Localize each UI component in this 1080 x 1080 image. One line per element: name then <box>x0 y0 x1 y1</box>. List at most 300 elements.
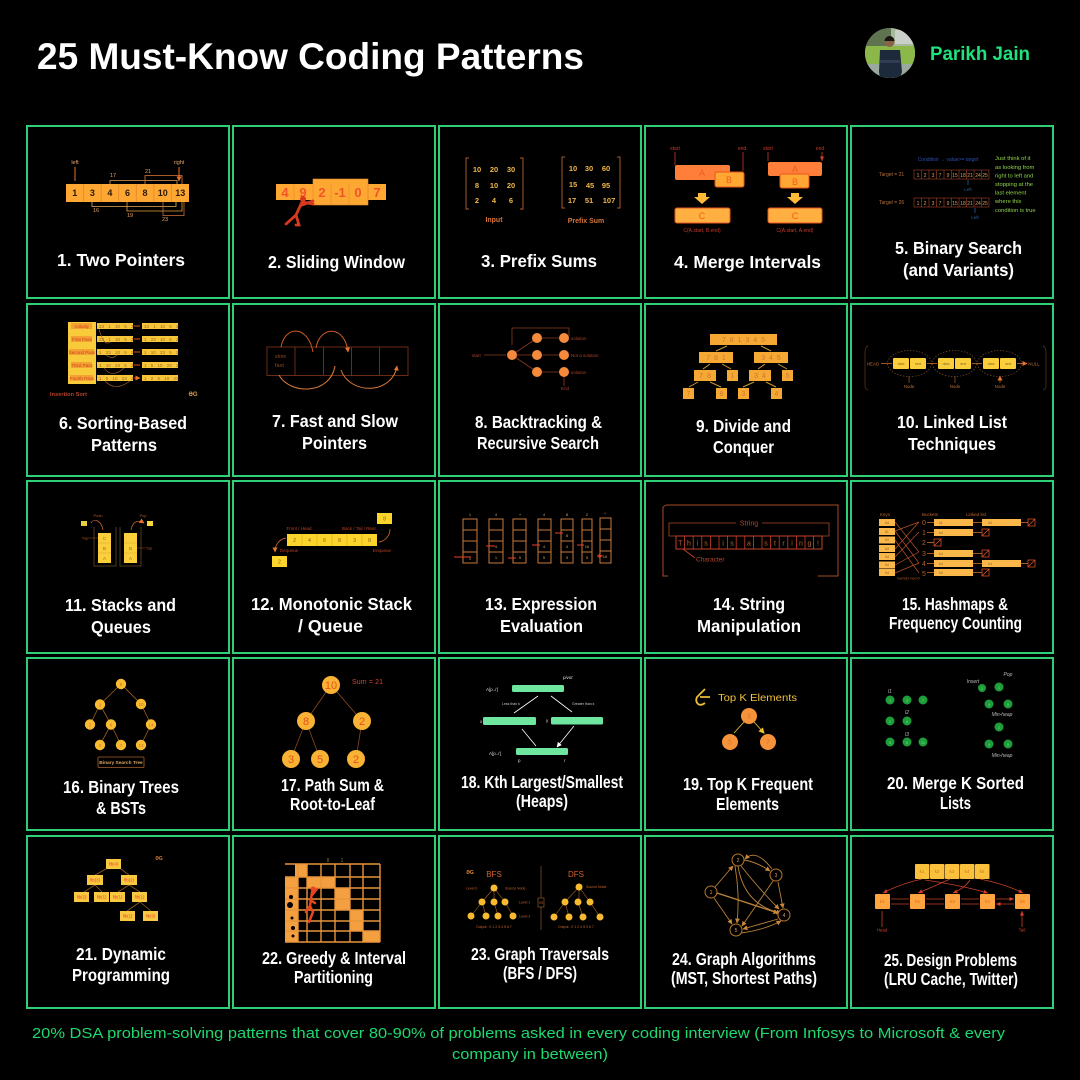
heading <box>63 777 179 818</box>
diagram: binary search tree: 14 <box>148 722 154 728</box>
panel frame <box>439 658 641 830</box>
diagram: hash table with linked lists: 5 <box>922 571 926 578</box>
diagram: binary search arrays: 2 <box>924 173 927 179</box>
diagram: sliding window with pushing figure: 9 <box>299 185 307 200</box>
diagram: hash table with linked lists: k1 <box>939 521 943 525</box>
diagram: BFS and DFS trees: Output : 0 1 2 4 5 3 6 7 <box>558 925 594 929</box>
diagram: backtracking state tree: Not a solution <box>571 353 599 358</box>
icon: LeetCode logo <box>696 689 710 705</box>
panel: 3 Prefix Sums <box>439 126 641 298</box>
diagram: binary search arrays: 18 <box>960 173 966 179</box>
diagram: string as character array: n <box>799 540 803 548</box>
heading: 8. Backtracking & <box>475 412 602 432</box>
heading: 6. Sorting-Based <box>59 413 187 433</box>
heading <box>671 949 817 988</box>
diagram: k sorted lists and min-heaps: Insert <box>967 679 980 685</box>
diagram: merged intervals: end <box>816 146 824 152</box>
diagram: string as character array: String <box>740 520 758 528</box>
diagram: linked list nodes: data <box>988 362 994 366</box>
panel: 10 Linked List Techniques <box>851 304 1053 476</box>
diagram: input and prefix sum matrices: 8 <box>475 181 479 190</box>
diagram: insertion sort passes: 1 10 23 5 2 <box>144 350 179 355</box>
diagram: expression stack steps: 5 <box>543 555 546 560</box>
diagram: LRU cache hash map and doubly linked list: Tail <box>1019 928 1025 932</box>
heading <box>475 412 602 453</box>
heading: Patterns <box>91 435 157 455</box>
diagram: expression stack steps: 8 <box>566 533 569 538</box>
panel frame <box>27 481 229 653</box>
diagram: binary search arrays: Target = 26 <box>879 200 904 206</box>
diagram: string as character array <box>663 505 838 576</box>
author badge <box>865 28 1030 78</box>
diagram: BFS and DFS trees: DFS <box>568 870 584 879</box>
diagram: input and prefix sum matrices: 4 <box>492 196 497 205</box>
diagram: binary search arrays: 15 <box>952 201 958 207</box>
diagram: input and prefix sum matrices: 60 <box>602 164 610 173</box>
diagram: string as character array: i <box>697 540 699 548</box>
diagram: queue enqueue and dequeue: Front / Head <box>286 526 312 531</box>
title: 25 Must-Know Coding Patterns <box>37 36 584 77</box>
diagram: divide and conquer tree: 7 8 1 3 4 5 <box>722 337 765 344</box>
diagram: insertion sort passes: ƏG <box>188 392 198 398</box>
diagram: divide and conquer tree: 7 8 1 <box>706 355 726 362</box>
diagram: LRU cache hash map and doubly linked list: k1 <box>880 899 885 904</box>
diagram: fibonacci recursion tree <box>74 856 163 921</box>
diagram: queue enqueue and dequeue: 2 <box>293 538 296 544</box>
diagram: merged intervals: A <box>792 164 798 174</box>
diagram: expression stack steps: 2 <box>586 512 589 517</box>
diagram: two pointers array: 8 <box>142 188 148 198</box>
diagram: linked list nodes: data <box>898 362 904 366</box>
diagram: binary search tree: Binary Search Tree <box>99 760 143 766</box>
panel frame <box>233 126 435 298</box>
diagram: expression stack steps: 5 <box>566 555 569 560</box>
diagram: hash table with linked lists: 0 <box>922 520 926 527</box>
diagram: linked list nodes: data <box>943 362 949 366</box>
heading <box>895 238 1022 280</box>
heading <box>884 950 1018 989</box>
diagram: sliding window with pushing figure: 0 <box>354 185 362 200</box>
panel frame <box>233 481 435 653</box>
diagram: quickselect partition bars: p <box>518 758 521 763</box>
diagram: input and prefix sum matrices: Input <box>485 217 503 224</box>
heading: 7. Fast and Slow <box>272 411 398 431</box>
diagram: top k elements heap: 3 <box>747 714 751 720</box>
diagram: k sorted lists and min-heaps: 1 <box>889 698 892 703</box>
diagram: fibonacci recursion tree: fib(1) <box>135 894 145 900</box>
diagram: string as character array: t <box>774 540 776 548</box>
heading <box>251 594 412 636</box>
diagram: k sorted lists and min-heaps: 1 <box>981 686 984 691</box>
panel frame <box>27 304 229 476</box>
diagram: merged intervals: C <box>699 211 706 221</box>
diagram: expression stack steps: 1 <box>495 555 498 560</box>
heading: Queues <box>91 617 151 637</box>
diagram: expression stack steps: 8 <box>566 512 569 517</box>
diagram: merged intervals: C(A.start, A.end) <box>777 228 814 234</box>
diagram: binary search arrays: 1 <box>917 173 920 179</box>
diagram: queue enqueue and dequeue: 8 <box>338 538 341 544</box>
diagram: string as character array: Character <box>696 556 725 564</box>
diagram: binary search arrays: 7 <box>939 201 942 207</box>
heading: Frequency Counting <box>889 613 1022 633</box>
heading: 5. Binary Search <box>895 238 1022 258</box>
heading: Evaluation <box>500 616 583 636</box>
diagram: two pointers array: right <box>174 160 185 166</box>
diagram: path sum tree: 10 <box>325 680 337 692</box>
diagram: insertion sort passes: First Pass <box>72 337 93 342</box>
heading: Elements <box>716 794 779 814</box>
diagram: divide and conquer tree: 5 <box>786 373 790 380</box>
heading <box>889 594 1022 633</box>
diagram: string as character array: T <box>678 540 683 548</box>
diagram: insertion sort passes: 23 1 10 5 2 <box>144 324 179 329</box>
diagram: stack push and pop: A <box>103 556 106 561</box>
diagram: input and prefix sum matrices: 6 <box>509 196 513 205</box>
diagram: backtracking state tree: End <box>561 386 570 391</box>
heading: 1. Two Pointers <box>57 250 185 270</box>
diagram: input and prefix sum matrices: 17 <box>568 196 576 205</box>
diagram: k sorted lists and min-heaps: 1 <box>998 685 1001 690</box>
diagram: backtracking state tree <box>472 328 599 391</box>
diagram: binary search arrays <box>879 156 1036 220</box>
diagram: linked list nodes <box>865 346 1046 390</box>
panel: 18 Kth Largest/Smallest (Heaps) <box>439 658 641 830</box>
diagram: binary search tree: 13 <box>138 743 144 748</box>
diagram: LRU cache hash map and doubly linked list: Head <box>877 928 888 932</box>
diagram: hash table with linked lists: k3 <box>885 547 889 551</box>
diagram: divide and conquer tree: 8 <box>720 391 724 398</box>
diagram: hash table with linked lists: k3 <box>988 521 992 525</box>
diagram: binary search arrays: 7 <box>939 173 942 179</box>
diagram: binary search arrays: 24 <box>975 173 981 179</box>
diagram: divide and conquer tree <box>683 334 793 399</box>
diagram: quickselect partition bars: y <box>546 718 549 723</box>
diagram: string as character array: g <box>808 540 812 548</box>
diagram: binary search tree: 6 <box>110 722 113 728</box>
heading <box>897 412 1007 454</box>
heading: 9. Divide and <box>696 416 791 436</box>
icon: author avatar photo <box>865 28 915 78</box>
diagram: string as character array: s <box>764 540 768 548</box>
diagram: input and prefix sum matrices: 2 <box>475 196 479 205</box>
diagram: hash table with linked lists: k4 <box>885 571 889 575</box>
diagram: path sum tree: 2 <box>353 754 359 766</box>
diagram: hash table with linked lists: k3 <box>885 538 889 542</box>
heading: 4. Merge Intervals <box>674 252 821 272</box>
panel: 4 Merge Intervals <box>645 126 847 298</box>
panel frame <box>851 836 1053 1008</box>
panel: 14 String Manipulation <box>645 481 847 653</box>
diagram: insertion sort passes: 23 1 10 5 2 <box>99 337 134 342</box>
diagram: expression stack steps: 16 <box>603 554 608 559</box>
diagram: hash table with linked lists <box>879 512 1035 580</box>
diagram: two pointers array: left <box>71 160 79 166</box>
diagram: string as character array: i <box>791 540 793 548</box>
diagram: hash table with linked lists: k4 <box>939 552 943 556</box>
heading: (MST, Shortest Paths) <box>671 968 817 988</box>
diagram: sliding window with pushing figure: 4 <box>281 185 289 200</box>
panel: 16 Binary Trees & BSTs <box>27 658 229 830</box>
diagram: k sorted lists and min-heaps: 6 <box>906 740 909 745</box>
diagram: merged intervals: start <box>670 146 680 152</box>
diagram: fibonacci recursion tree: fib(2) <box>124 878 134 882</box>
diagram: expression stack steps: 16 <box>585 544 590 549</box>
diagram: BFS and DFS trees: Level 1 <box>519 900 530 904</box>
heading <box>696 416 791 457</box>
heading: 10. Linked List <box>897 412 1007 432</box>
diagram: input and prefix sum matrices: Prefix Sum <box>568 218 604 225</box>
diagram: binary search arrays: 2 <box>924 201 927 207</box>
diagram: BFS and DFS trees <box>466 866 606 930</box>
panel frame <box>27 836 229 1008</box>
diagram: expression stack steps: * <box>604 511 606 516</box>
heading: 20. Merge K Sorted <box>887 773 1024 793</box>
diagram: hash table with linked lists: k4 <box>885 555 889 559</box>
diagram: linked list nodes: next <box>915 362 921 366</box>
diagram: backtracking state tree: solution <box>571 370 587 375</box>
diagram: merged intervals: B <box>792 177 798 187</box>
diagram: linked list nodes: Node <box>904 384 915 389</box>
diagram: expression stack steps: 4 <box>495 544 498 549</box>
heading <box>65 595 176 637</box>
diagram: weighted directed graph: 3 <box>775 873 778 879</box>
panel frame <box>233 836 435 1008</box>
panel frame <box>439 481 641 653</box>
diagram: binary search arrays: 15 <box>952 173 958 179</box>
diagram: insertion sort passes: Third Pass <box>71 363 93 368</box>
panel: 8 Backtracking & Recursive Search <box>439 304 641 476</box>
heading: 21. Dynamic <box>76 944 166 964</box>
diagram: queue enqueue and dequeue: Dequeue <box>280 548 299 553</box>
diagram: queue enqueue and dequeue: 8 <box>383 516 386 522</box>
diagram: quickselect partition bars: pivot <box>562 675 573 680</box>
diagram: k sorted lists and min-heaps: Pop <box>1004 672 1013 678</box>
heading: Recursive Search <box>477 433 599 453</box>
diagram: quickselect partition bars: r <box>564 758 566 763</box>
diagram: quickselect partition bars: Less than k <box>502 702 520 706</box>
diagram: string as character array: a <box>747 540 751 548</box>
panel frame <box>233 658 435 830</box>
diagram: expression stack steps <box>454 511 611 563</box>
diagram: divide and conquer tree: 7 8 <box>699 373 711 380</box>
diagram: hash table with linked lists: 1 <box>922 530 926 537</box>
panel: 23 Graph Traversals (BFS / DFS) <box>439 836 641 1008</box>
diagram: insertion sort passes: 1 5 10 23 2 <box>144 363 179 368</box>
diagram: binary search tree: 7 <box>120 743 123 748</box>
diagram: input and prefix sum matrices: 20 <box>507 181 515 190</box>
diagram: sliding window with pushing figure <box>276 179 386 225</box>
diagram: sliding window with pushing figure: -1 <box>334 185 346 200</box>
heading: 14. String <box>713 594 785 614</box>
heading: 15. Hashmaps & <box>902 594 1008 614</box>
diagram: k sorted lists and min-heaps: l1 <box>888 689 892 695</box>
diagram: quickselect partition bars: x <box>480 719 483 724</box>
diagram: merged intervals: start <box>763 146 773 152</box>
heading: 22. Greedy & Interval <box>262 948 406 968</box>
diagram: insertion sort passes: 1 10 23 5 2 <box>99 363 134 368</box>
heading: Lists <box>940 793 971 813</box>
diagram: BFS and DFS trees: Source Node <box>586 885 606 889</box>
diagram: queue enqueue and dequeue: 2 <box>278 560 281 566</box>
diagram: stack push and pop: Push <box>93 513 103 518</box>
diagram: binary search tree: 1 <box>89 722 92 728</box>
diagram: k sorted lists and min-heaps: Min-heap <box>992 712 1013 718</box>
diagram: backtracking state tree: start <box>472 353 482 358</box>
diagram: binary search tree: 4 <box>99 743 102 748</box>
heading: (BFS / DFS) <box>503 963 577 983</box>
diagram: fibonacci recursion tree: fib(4) <box>109 862 119 866</box>
diagram: greedy grid path with climber: 1 <box>341 858 344 864</box>
panel frame <box>645 126 847 298</box>
diagram: hash table with linked lists: k4 <box>939 562 943 566</box>
diagram: BFS and DFS trees: Source Node <box>505 886 525 890</box>
diagram: weighted directed graph: 1 <box>710 890 713 896</box>
diagram: fast and slow pointer jumps: fast <box>275 363 284 369</box>
diagram: hash table with linked lists: k4 <box>939 531 943 535</box>
diagram: divide and conquer tree: 1 <box>731 373 735 380</box>
heading: Root-to-Leaf <box>290 794 375 814</box>
heading: Programming <box>72 965 170 985</box>
heading: 12. Monotonic Stack <box>251 594 412 614</box>
diagram: queue enqueue and dequeue: Enqueue <box>373 548 391 553</box>
diagram: expression stack steps: + <box>519 512 522 517</box>
diagram: string as character array: s <box>704 540 708 548</box>
heading <box>461 772 623 811</box>
diagram: stack push and pop: Pop <box>139 513 147 518</box>
diagram: k sorted lists and min-heaps: 4 <box>988 742 991 747</box>
diagram: LRU cache hash map and doubly linked list: k2 <box>915 899 920 904</box>
diagram: hash table with linked lists: 3 <box>922 551 926 558</box>
diagram: input and prefix sum matrices: 30 <box>585 164 593 173</box>
diagram: k sorted lists and min-heaps: Min-heap <box>992 753 1013 759</box>
diagram: two pointers array: 10 <box>158 188 168 198</box>
diagram: BFS and DFS trees: Level 2 <box>519 914 530 918</box>
diagram: fast and slow pointer jumps: slow <box>275 354 286 360</box>
diagram: BFS and DFS trees: Output : 0 1 2 3 4 5 6 7 <box>476 925 512 929</box>
diagram: expression stack steps: 4 <box>543 544 546 549</box>
panel: 9 Divide and Conquer <box>645 304 847 476</box>
diagram: linked list nodes: Node <box>950 384 961 389</box>
diagram: LRU cache hash map and doubly linked list: k1 <box>920 869 925 874</box>
diagram: stack push and pop: B <box>129 546 132 551</box>
diagram: path sum tree: 8 <box>303 716 309 728</box>
diagram: backtracking state tree: solution <box>571 336 587 341</box>
diagram: insertion sort passes: Insertion Sort <box>50 392 87 398</box>
diagram: expression stack steps: 5 <box>519 555 522 560</box>
diagram: binary search arrays: 25 <box>982 201 988 207</box>
diagram: two pointers array: 16 <box>93 208 99 214</box>
panel frame <box>27 126 229 298</box>
diagram: binary search arrays: Just think of it <box>995 156 1031 162</box>
diagram: fibonacci recursion tree: fib(1) <box>123 914 133 918</box>
panel frame <box>645 836 847 1008</box>
footer caption: 20% DSA problem-solving patterns that cover 80-90% of problems asked in every coding interview (From Infosys to Microsoft & every <box>32 1025 1006 1042</box>
diagram: hash table with linked lists: k1 <box>885 530 889 534</box>
diagram: LRU cache hash map and doubly linked list: k3 <box>950 899 955 904</box>
diagram: binary search arrays: Left <box>971 215 979 220</box>
diagram: input and prefix sum matrices: 107 <box>603 196 615 205</box>
diagram: binary search arrays: last element <box>995 190 1027 196</box>
diagram: two pointers array: 17 <box>110 173 116 179</box>
diagram: hash table with linked lists: k4 <box>988 562 992 566</box>
diagram: hash table with linked lists: k4 <box>885 563 889 567</box>
panel frame <box>645 304 847 476</box>
diagram: binary search arrays: 3 <box>932 173 935 179</box>
diagram: merged intervals: C(A.start, B.end) <box>683 228 721 234</box>
diagram: linked list nodes: next <box>1005 362 1011 366</box>
heading <box>72 944 170 985</box>
diagram: LRU cache hash map and doubly linked list: k3 <box>950 869 955 874</box>
diagram: k sorted lists and min-heaps: 4 <box>906 719 909 724</box>
diagram: binary search arrays: where this <box>994 199 1022 205</box>
diagram: binary search arrays: 21 <box>967 201 973 207</box>
diagram: binary search arrays: 24 <box>975 201 981 207</box>
diagram: quickselect partition bars: A[p..r] <box>486 687 498 692</box>
diagram: stack push and pop: C <box>103 536 107 541</box>
panel: 22 Greedy & Interval Partitioning <box>233 836 435 1008</box>
diagram: binary search arrays: 21 <box>967 173 973 179</box>
heading <box>262 948 406 987</box>
heading: 11. Stacks and <box>65 595 176 615</box>
diagram: expression stack steps: 1 <box>469 512 472 517</box>
diagram: top k elements heap: 7 <box>766 740 770 746</box>
diagram: stack push and pop: A <box>129 556 132 561</box>
heading: 2. Sliding Window <box>268 252 405 272</box>
heading <box>471 944 609 983</box>
diagram: input and prefix sum matrices: 51 <box>585 196 593 205</box>
diagram: LRU cache hash map and doubly linked list: k4 <box>985 899 990 904</box>
diagram: binary search tree: 8 <box>120 682 123 687</box>
heading: 25. Design Problems <box>884 950 1017 970</box>
diagram: k sorted lists and min-heaps: 2 <box>889 719 892 724</box>
diagram: hash table with linked lists: Buckets <box>922 512 939 517</box>
diagram: k sorted lists and min-heaps <box>886 672 1013 759</box>
heading: 24. Graph Algorithms <box>672 949 816 969</box>
diagram: k sorted lists and min-heaps: 5 <box>1007 742 1010 747</box>
diagram: LRU cache hash map and doubly linked list: k2 <box>935 869 940 874</box>
diagram: LRU cache hash map and doubly linked list: k5 <box>1020 899 1025 904</box>
diagram: expression stack steps: 4 <box>543 512 546 517</box>
diagram: path sum tree: 5 <box>317 754 323 766</box>
diagram: merged intervals: end <box>738 146 746 152</box>
panel frame <box>851 126 1053 298</box>
heading: (LRU Cache, Twitter) <box>884 969 1018 989</box>
diagram: input and prefix sum matrices: 20 <box>490 165 498 174</box>
diagram: two pointers array: 23 <box>162 217 168 223</box>
diagram: queue enqueue and dequeue: Back / Tail / Rear <box>342 526 376 531</box>
diagram: k sorted lists and min-heaps: l2 <box>905 710 909 716</box>
diagram: linked list nodes: Node <box>995 384 1006 389</box>
panel frame <box>439 304 641 476</box>
diagram: divide and conquer tree: 4 <box>775 391 779 398</box>
panel frame <box>439 836 641 1008</box>
diagram: input and prefix sum matrices: 10 <box>490 181 498 190</box>
diagram: stack push and pop: Top <box>146 546 153 550</box>
diagram: merged intervals: C <box>792 211 799 221</box>
diagram: path sum tree: 2 <box>359 716 365 728</box>
diagram: queue enqueue and dequeue: 4 <box>308 538 311 544</box>
diagram: binary search tree: 10 <box>138 702 144 707</box>
panel: 19 Top K Frequent Elements <box>645 658 847 830</box>
diagram: fast and slow pointer jumps <box>267 331 408 389</box>
diagram: hash table with linked lists: 2 <box>922 540 926 547</box>
diagram: two pointers array: 6 <box>125 188 130 198</box>
diagram: k sorted lists and min-heaps: 4 <box>988 702 991 707</box>
diagram: linked list nodes: next <box>960 362 966 366</box>
diagram: BFS and DFS trees: BFS <box>486 870 502 879</box>
diagram: queue enqueue and dequeue: 8 <box>368 538 371 544</box>
